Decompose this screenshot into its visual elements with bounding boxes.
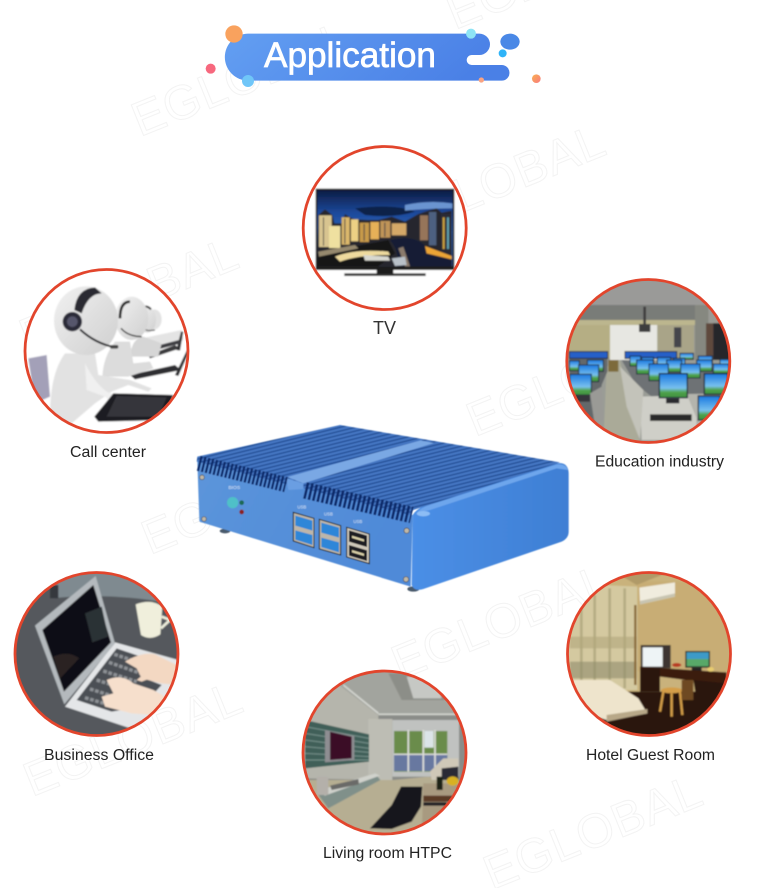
living room ring: [303, 671, 466, 834]
panel: Call center: [24, 268, 190, 457]
floor: [309, 776, 459, 833]
right side face: [412, 463, 569, 590]
heatsink top: [197, 425, 560, 515]
title text: Application: [264, 36, 436, 75]
coat rack: [633, 604, 638, 686]
TV: [641, 645, 671, 668]
air conditioner: [639, 582, 675, 604]
hotel ring: [568, 572, 730, 736]
call center photo: [27, 276, 187, 423]
curtain: [567, 585, 637, 690]
ceiling: [340, 672, 454, 714]
near figure: [50, 286, 152, 423]
title banner: [206, 25, 541, 87]
right vent slots: [305, 490, 412, 515]
education ring: [567, 280, 730, 442]
USB 2 ports: USB: [353, 519, 362, 524]
monitor rows: [569, 352, 729, 395]
LEDs: [239, 500, 244, 514]
USB 2 ports: [347, 519, 369, 564]
mini PC device: [197, 425, 569, 592]
banner pill: [225, 34, 509, 81]
watermarks: EGLOBAL: [384, 554, 618, 690]
panel: TV: [302, 145, 468, 334]
hotel room photo: [568, 574, 730, 734]
classroom photo: [568, 280, 728, 442]
screws: [200, 475, 409, 582]
watermarks: EGLOBAL: [134, 429, 368, 565]
education label: Education industry: [595, 454, 724, 470]
corner highlight: [417, 511, 430, 516]
laptop photo: [16, 574, 177, 734]
watermarks: EGLOBAL: [16, 671, 250, 807]
living room label: Living room HTPC: [323, 845, 452, 862]
bed: [570, 680, 647, 720]
power button: [227, 497, 238, 508]
hands: [102, 654, 177, 715]
center bar: [287, 478, 303, 490]
call center ring: [25, 270, 188, 432]
tv bench: [317, 773, 380, 808]
USB 3 ports middle: USB: [324, 511, 333, 516]
panel: Education industry: [565, 278, 732, 470]
wall TV: [325, 730, 354, 762]
far figures: [102, 297, 162, 377]
business label: Business Office: [44, 747, 154, 764]
panel: Business Office: [14, 571, 180, 760]
USB 3 ports left: USB: [297, 504, 306, 509]
front face: [197, 462, 413, 587]
rug: [370, 787, 422, 829]
TV label: TV: [373, 318, 396, 338]
decorative dots: [206, 25, 541, 87]
TV photo: [314, 188, 456, 277]
business ring: [15, 572, 178, 736]
watermarks: EGLOBAL: [459, 311, 693, 447]
stool: [660, 680, 693, 717]
watermarks: EGLOBAL: [124, 11, 358, 147]
front monitors: [659, 374, 728, 420]
laptop base: [65, 642, 178, 728]
USB 3 ports left: [293, 504, 314, 548]
window: [392, 720, 459, 777]
left wall: [304, 686, 379, 780]
power label: BIOS: [228, 485, 241, 491]
TV ring: [303, 146, 466, 310]
call center label: Call center: [70, 444, 146, 461]
mug: [136, 602, 170, 638]
watermarks: EGLOBAL: [12, 227, 246, 363]
monitor: [685, 651, 710, 672]
coffee table and chair: [422, 757, 460, 823]
banner blob: [500, 34, 520, 50]
feet: [220, 529, 546, 592]
hotel label: Hotel Guest Room: [586, 747, 715, 764]
panel: Living room HTPC: [302, 670, 468, 862]
left vent slots: [199, 463, 286, 485]
USB 3 ports middle: [319, 511, 341, 555]
laptop lid: [35, 576, 115, 704]
living room photo: [304, 672, 465, 833]
watermarks: EGLOBAL: [379, 114, 613, 250]
panel: Hotel Guest Room: [566, 571, 732, 760]
floor and desk: [600, 690, 700, 734]
